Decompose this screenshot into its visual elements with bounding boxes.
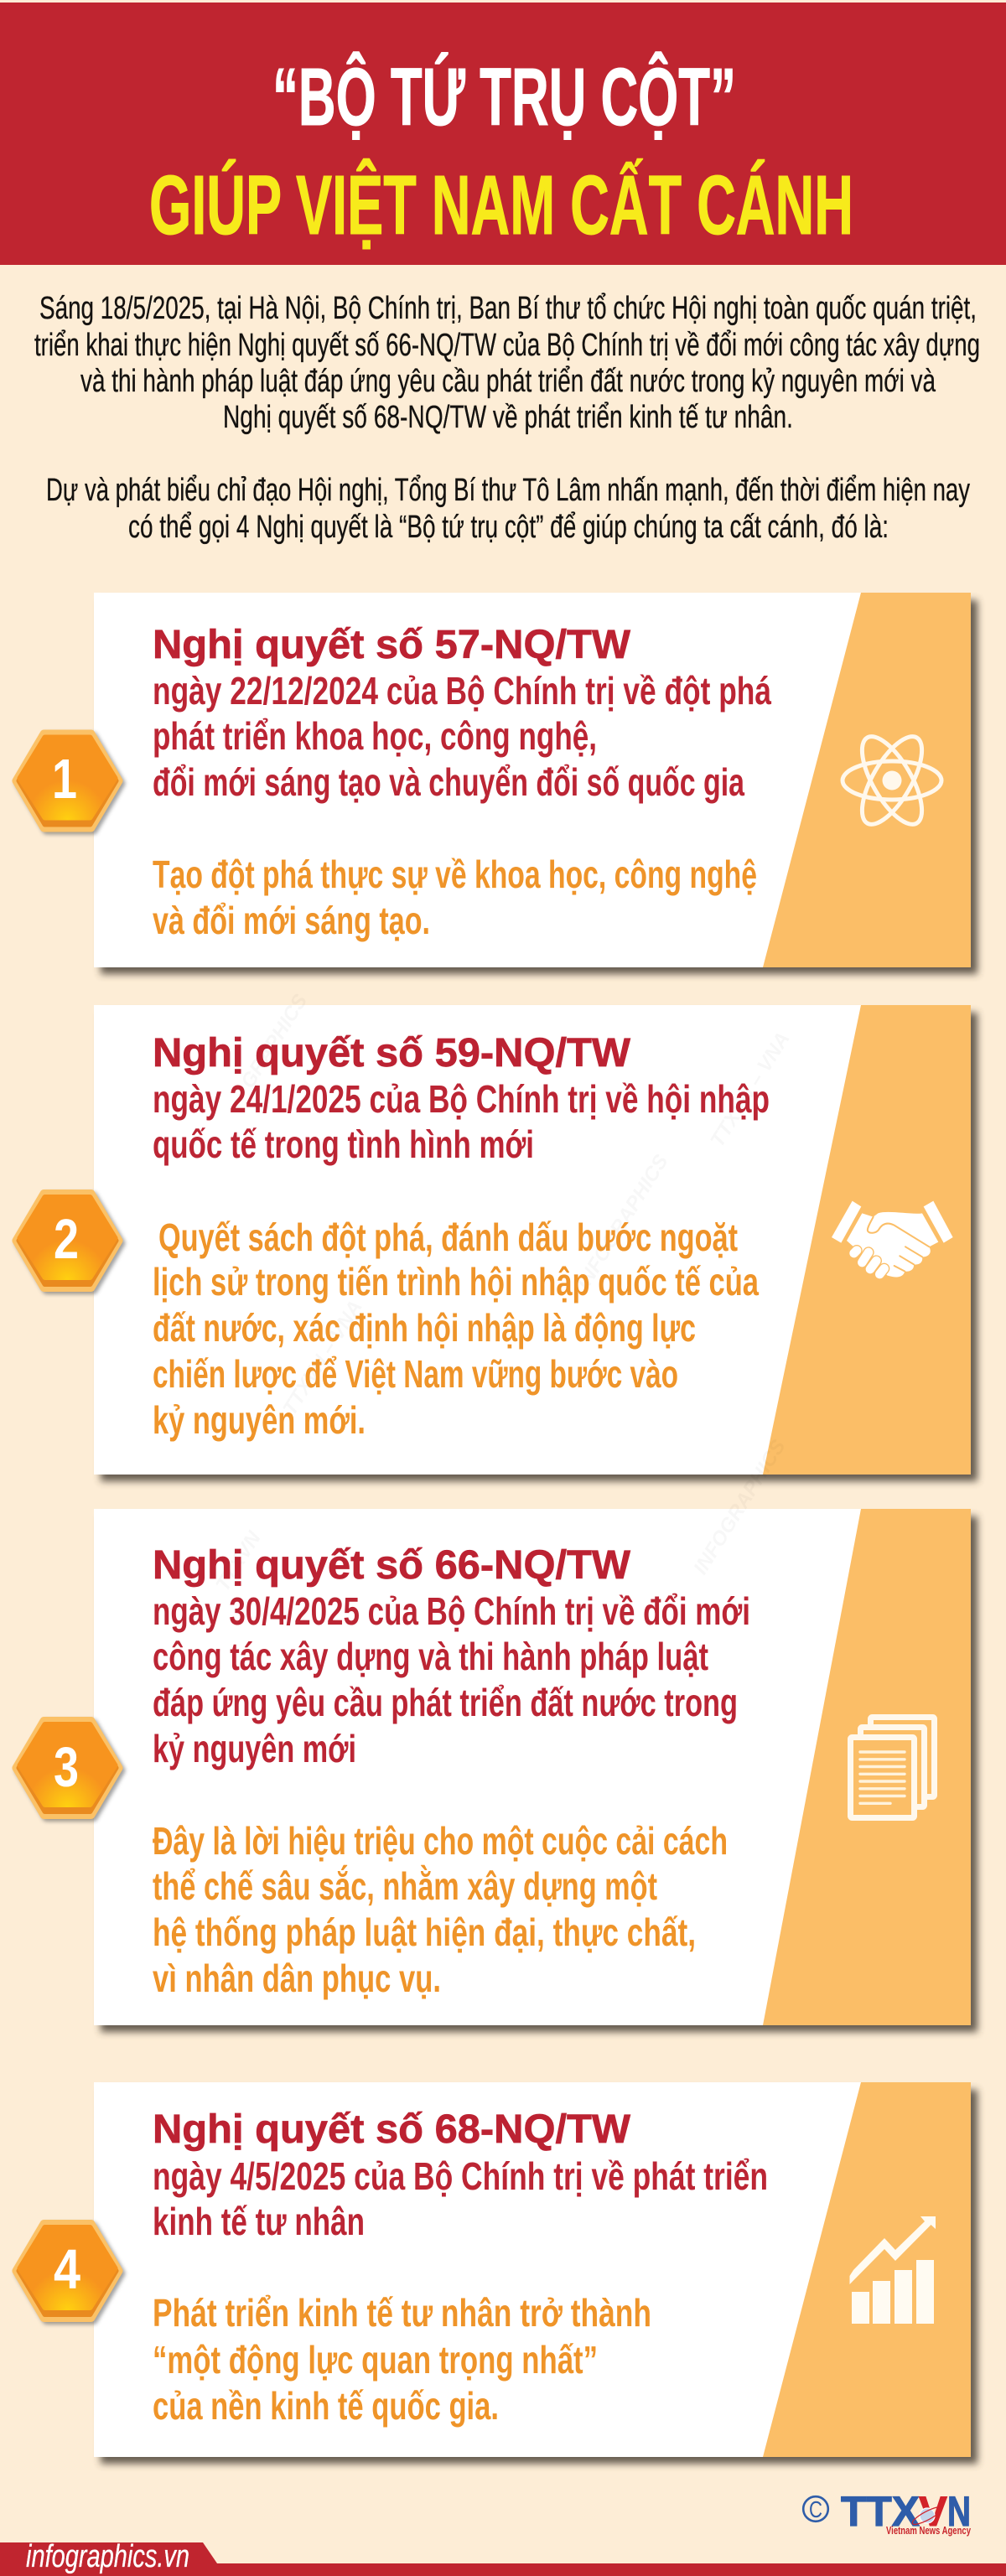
resolution 68 title: Nghị quyết số 68-NQ/TW <box>153 2107 631 2152</box>
footer band <box>0 2539 1006 2576</box>
resolution 57 highlight: Tạo đột phá thực sự về khoa học, công nghệ <box>153 853 757 896</box>
panel: resolution 59 <box>17 990 977 1481</box>
logo: TTXVN <box>803 2487 971 2537</box>
resolution 57 highlight: và đổi mới sáng tạo. <box>153 899 430 942</box>
resolution 59 highlight: kỷ nguyên mới. <box>153 1398 366 1442</box>
resolution 66 description: đáp ứng yêu cầu phát triển đất nước trong <box>153 1681 738 1724</box>
resolution 57 description <box>153 669 771 804</box>
resolution 59 highlight <box>153 1215 759 1442</box>
resolution 57 highlight <box>153 853 757 942</box>
title line 1: “BỘ TỨ TRỤ CỘT” <box>272 51 736 143</box>
icon: atom <box>843 728 941 833</box>
panel: resolution 66 <box>17 1436 977 2032</box>
resolution 57 description: phát triển khoa học, công nghệ, <box>153 714 597 758</box>
logo: TTXVN: N <box>947 2487 971 2535</box>
resolution 59 description <box>153 1077 770 1166</box>
resolution 66 highlight: thể chế sâu sắc, nhằm xây dựng một <box>153 1864 657 1908</box>
resolution 66 highlight: Đây là lời hiệu triệu cho một cuộc cải cách <box>153 1819 728 1863</box>
panel: resolution 66: INFOGRAPHICS <box>689 1436 791 1578</box>
resolution 66 description: ngày 30/4/2025 của Bộ Chính trị về đổi mới <box>153 1589 750 1633</box>
resolution 59 title: Nghị quyết số 59-NQ/TW <box>153 1031 631 1075</box>
number badge 4 <box>17 2224 121 2320</box>
intro paragraph 1 <box>34 291 980 435</box>
resolution 66 highlight: vì nhân dân phục vụ. <box>153 1957 441 2000</box>
resolution 68 description: kinh tế tư nhân <box>153 2200 365 2243</box>
icon: growth chart <box>850 2216 936 2324</box>
resolution 59 description: ngày 24/1/2025 của Bộ Chính trị về hội nhập <box>153 1077 770 1121</box>
intro paragraph 2 <box>46 473 970 545</box>
panel: resolution 59: GRAPHICS <box>236 990 312 1092</box>
resolution 68 description <box>153 2154 768 2243</box>
resolution 68 highlight: của nền kinh tế quốc gia. <box>153 2384 499 2428</box>
panel: resolution 59: INFOGRAPHICS <box>572 1151 673 1293</box>
number badge 1 <box>17 734 121 830</box>
logo: TTXVN: Vietnam News Agency <box>886 2525 971 2537</box>
resolution 59 highlight: đất nước, xác định hội nhập là động lực <box>153 1306 696 1350</box>
number badge 3 <box>17 1721 121 1817</box>
intro paragraph 1: Nghị quyết số 68-NQ/TW về phát triển kinh tế tư nhân. <box>223 400 793 435</box>
number 4: 4 <box>54 2238 80 2301</box>
resolution 66 highlight <box>153 1819 728 2000</box>
logo: TTXVN: C <box>809 2496 822 2522</box>
resolution 57 description: đổi mới sáng tạo và chuyển đổi số quốc gia <box>153 760 744 804</box>
panel: resolution 59: TTXVN – VNA <box>706 1029 795 1151</box>
resolution 68 highlight: “một động lực quan trọng nhất” <box>153 2338 598 2382</box>
resolution 66 description: công tác xây dựng và thi hành pháp luật <box>153 1635 708 1678</box>
resolution 57 title: Nghị quyết số 57-NQ/TW <box>153 623 631 667</box>
panel: resolution 66: TTXVN <box>211 1527 266 1595</box>
panel: resolution 57 <box>17 593 977 974</box>
logo: TTXVN: TTX <box>841 2487 920 2535</box>
resolution 59 description: quốc tế trong tình hình mới <box>153 1122 534 1166</box>
resolution 68 highlight <box>153 2291 651 2428</box>
icon: handshake <box>832 1201 953 1277</box>
resolution 66 description <box>153 1589 750 1770</box>
header band <box>0 3 1006 265</box>
number 3: 3 <box>54 1736 79 1799</box>
resolution 68 description: ngày 4/5/2025 của Bộ Chính trị về phát triển <box>153 2154 768 2198</box>
resolution 66 highlight: hệ thống pháp luật hiện đại, thực chất, <box>153 1910 696 1954</box>
resolution 57 description: ngày 22/12/2024 của Bộ Chính trị về đột phá <box>153 669 771 713</box>
footer site name: infographics.vn <box>26 2539 189 2574</box>
resolution 59 highlight: lịch sử trong tiến trình hội nhập quốc tế của <box>153 1260 759 1304</box>
panel: resolution 68 <box>17 2082 977 2464</box>
panel: resolution 59: TTXVN – VNA <box>278 1297 367 1419</box>
number 2: 2 <box>54 1208 79 1271</box>
number 1: 1 <box>52 748 77 811</box>
logo: TTXVN: V <box>919 2487 947 2535</box>
number badge 2 <box>17 1194 121 1290</box>
resolution 66 description: kỷ nguyên mới <box>153 1727 356 1770</box>
resolution 68 highlight: Phát triển kinh tế tư nhân trở thành <box>153 2291 651 2335</box>
icon: documents <box>850 1717 934 1817</box>
resolution 66 title: Nghị quyết số 66-NQ/TW <box>153 1543 631 1588</box>
resolution 59 highlight: Quyết sách đột phá, đánh dấu bước ngoặt <box>158 1215 738 1259</box>
resolution 59 highlight: chiến lược để Việt Nam vững bước vào <box>153 1352 678 1396</box>
